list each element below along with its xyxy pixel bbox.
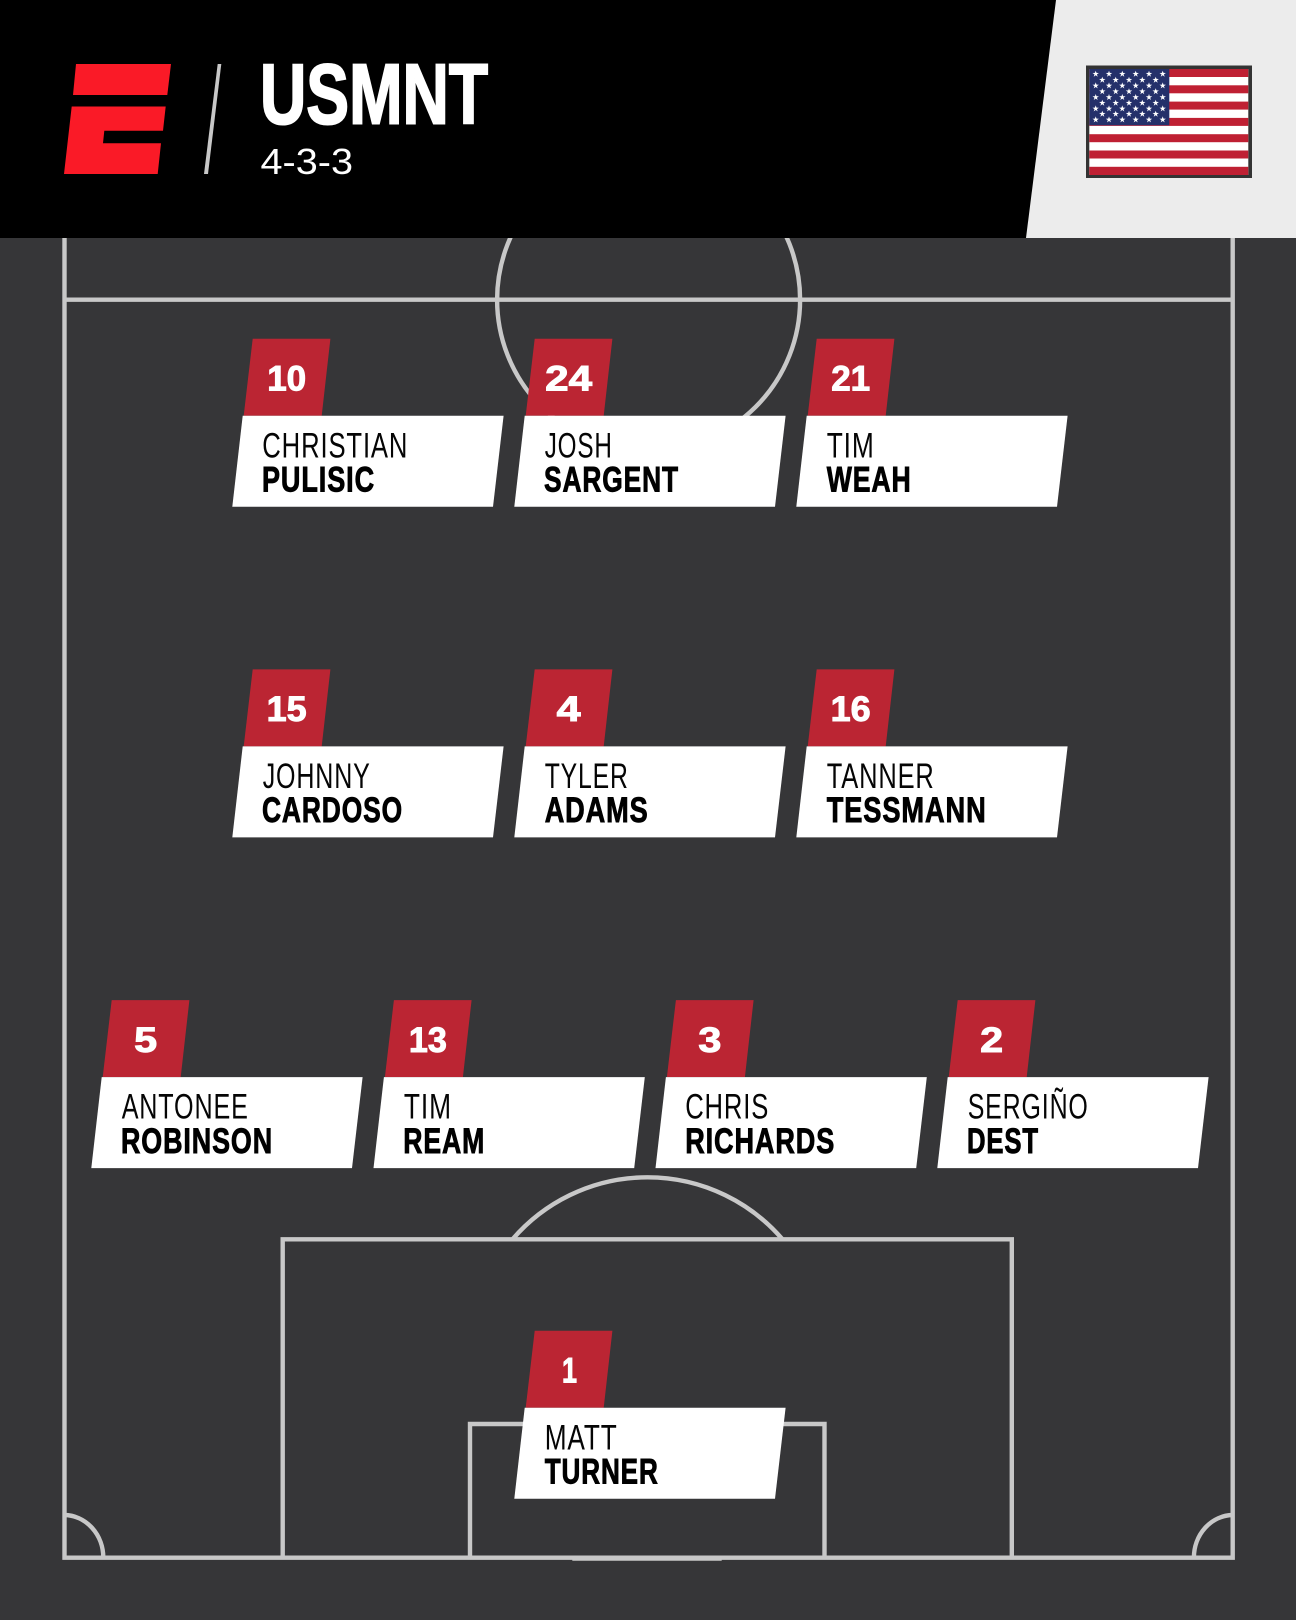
player card: 13 Tim Ream — [374, 1000, 645, 1168]
player card: 15 Johnny Cardoso: 15 — [267, 689, 307, 729]
player card: 10 Christian Pulisic — [232, 339, 504, 507]
player card: 1 Matt Turner: MATT — [545, 1417, 618, 1457]
right corner arc — [1194, 1515, 1233, 1558]
header bar — [0, 0, 1296, 238]
player card: 15 Johnny Cardoso: JOHNNY — [263, 756, 371, 796]
centre circle — [497, 148, 800, 451]
icon: ESPN E logo — [64, 64, 171, 174]
player card: 1 Matt Turner — [514, 1331, 786, 1499]
player card: 5 Antonee Robinson: ANTONEE — [122, 1087, 249, 1127]
player card: 13 Tim Ream: REAM — [403, 1121, 485, 1161]
player card: 16 Tanner Tessmann: TANNER — [827, 756, 935, 796]
player card: 2 Sergiño Dest: DEST — [967, 1121, 1039, 1161]
player card: 1 Matt Turner: 1 — [562, 1351, 577, 1391]
player card: 10 Christian Pulisic: CHRISTIAN — [262, 425, 408, 465]
logo divider slash — [204, 64, 221, 174]
goal area — [470, 1424, 824, 1558]
halfway line — [64, 298, 1233, 302]
left corner arc — [64, 1515, 103, 1558]
flag panel — [1026, 0, 1296, 238]
player card: 4 Tyler Adams: TYLER — [545, 756, 629, 796]
goal line marker — [572, 1558, 722, 1561]
penalty box — [283, 1239, 1012, 1558]
formation: 4-3-3 — [260, 141, 353, 182]
player card: 1 Matt Turner: TURNER — [545, 1452, 659, 1492]
player card: 3 Chris Richards: 3 — [698, 1020, 721, 1060]
player card: 21 Tim Weah — [796, 339, 1068, 507]
player card: 10 Christian Pulisic: 10 — [267, 358, 306, 398]
player card: 15 Johnny Cardoso: CARDOSO — [262, 790, 403, 830]
soccer pitch lines — [64, 148, 1233, 1559]
player card: 24 Josh Sargent — [514, 339, 786, 507]
player card: 5 Antonee Robinson: ROBINSON — [121, 1121, 273, 1161]
player card: 5 Antonee Robinson: 5 — [134, 1020, 157, 1060]
player card: 16 Tanner Tessmann — [796, 669, 1068, 837]
player card: 15 Johnny Cardoso — [232, 669, 504, 837]
player card: 24 Josh Sargent: SARGENT — [544, 460, 679, 500]
player card: 3 Chris Richards: RICHARDS — [685, 1121, 835, 1161]
player card: 13 Tim Ream: 13 — [409, 1020, 447, 1060]
title: team name: USMNT — [260, 48, 488, 142]
player card: 16 Tanner Tessmann: 16 — [831, 689, 871, 729]
player card: 10 Christian Pulisic: PULISIC — [262, 460, 375, 500]
player card: 4 Tyler Adams: ADAMS — [545, 790, 649, 830]
penalty arc — [512, 1177, 782, 1239]
player card: 24 Josh Sargent: JOSH — [545, 425, 613, 465]
player card: 21 Tim Weah: TIM — [827, 425, 875, 465]
player card: 2 Sergiño Dest — [937, 1000, 1209, 1168]
player card: 3 Chris Richards: CHRIS — [685, 1087, 769, 1127]
outer touchlines — [64, 230, 1233, 1558]
player card: 21 Tim Weah: WEAH — [827, 460, 912, 500]
player card: 21 Tim Weah: 21 — [831, 358, 870, 398]
player card: 3 Chris Richards — [656, 1000, 927, 1168]
player card: 5 Antonee Robinson — [91, 1000, 363, 1168]
player card: 2 Sergiño Dest: 2 — [980, 1020, 1003, 1060]
player card: 2 Sergiño Dest: SERGIÑO — [968, 1087, 1089, 1127]
player card: 4 Tyler Adams — [514, 669, 786, 837]
player card: 24 Josh Sargent: 24 — [545, 358, 592, 398]
player card: 13 Tim Ream: TIM — [404, 1087, 452, 1127]
player card: 4 Tyler Adams: 4 — [557, 689, 581, 729]
icon: US flag — [1086, 66, 1252, 178]
player card: 16 Tanner Tessmann: TESSMANN — [827, 790, 987, 830]
